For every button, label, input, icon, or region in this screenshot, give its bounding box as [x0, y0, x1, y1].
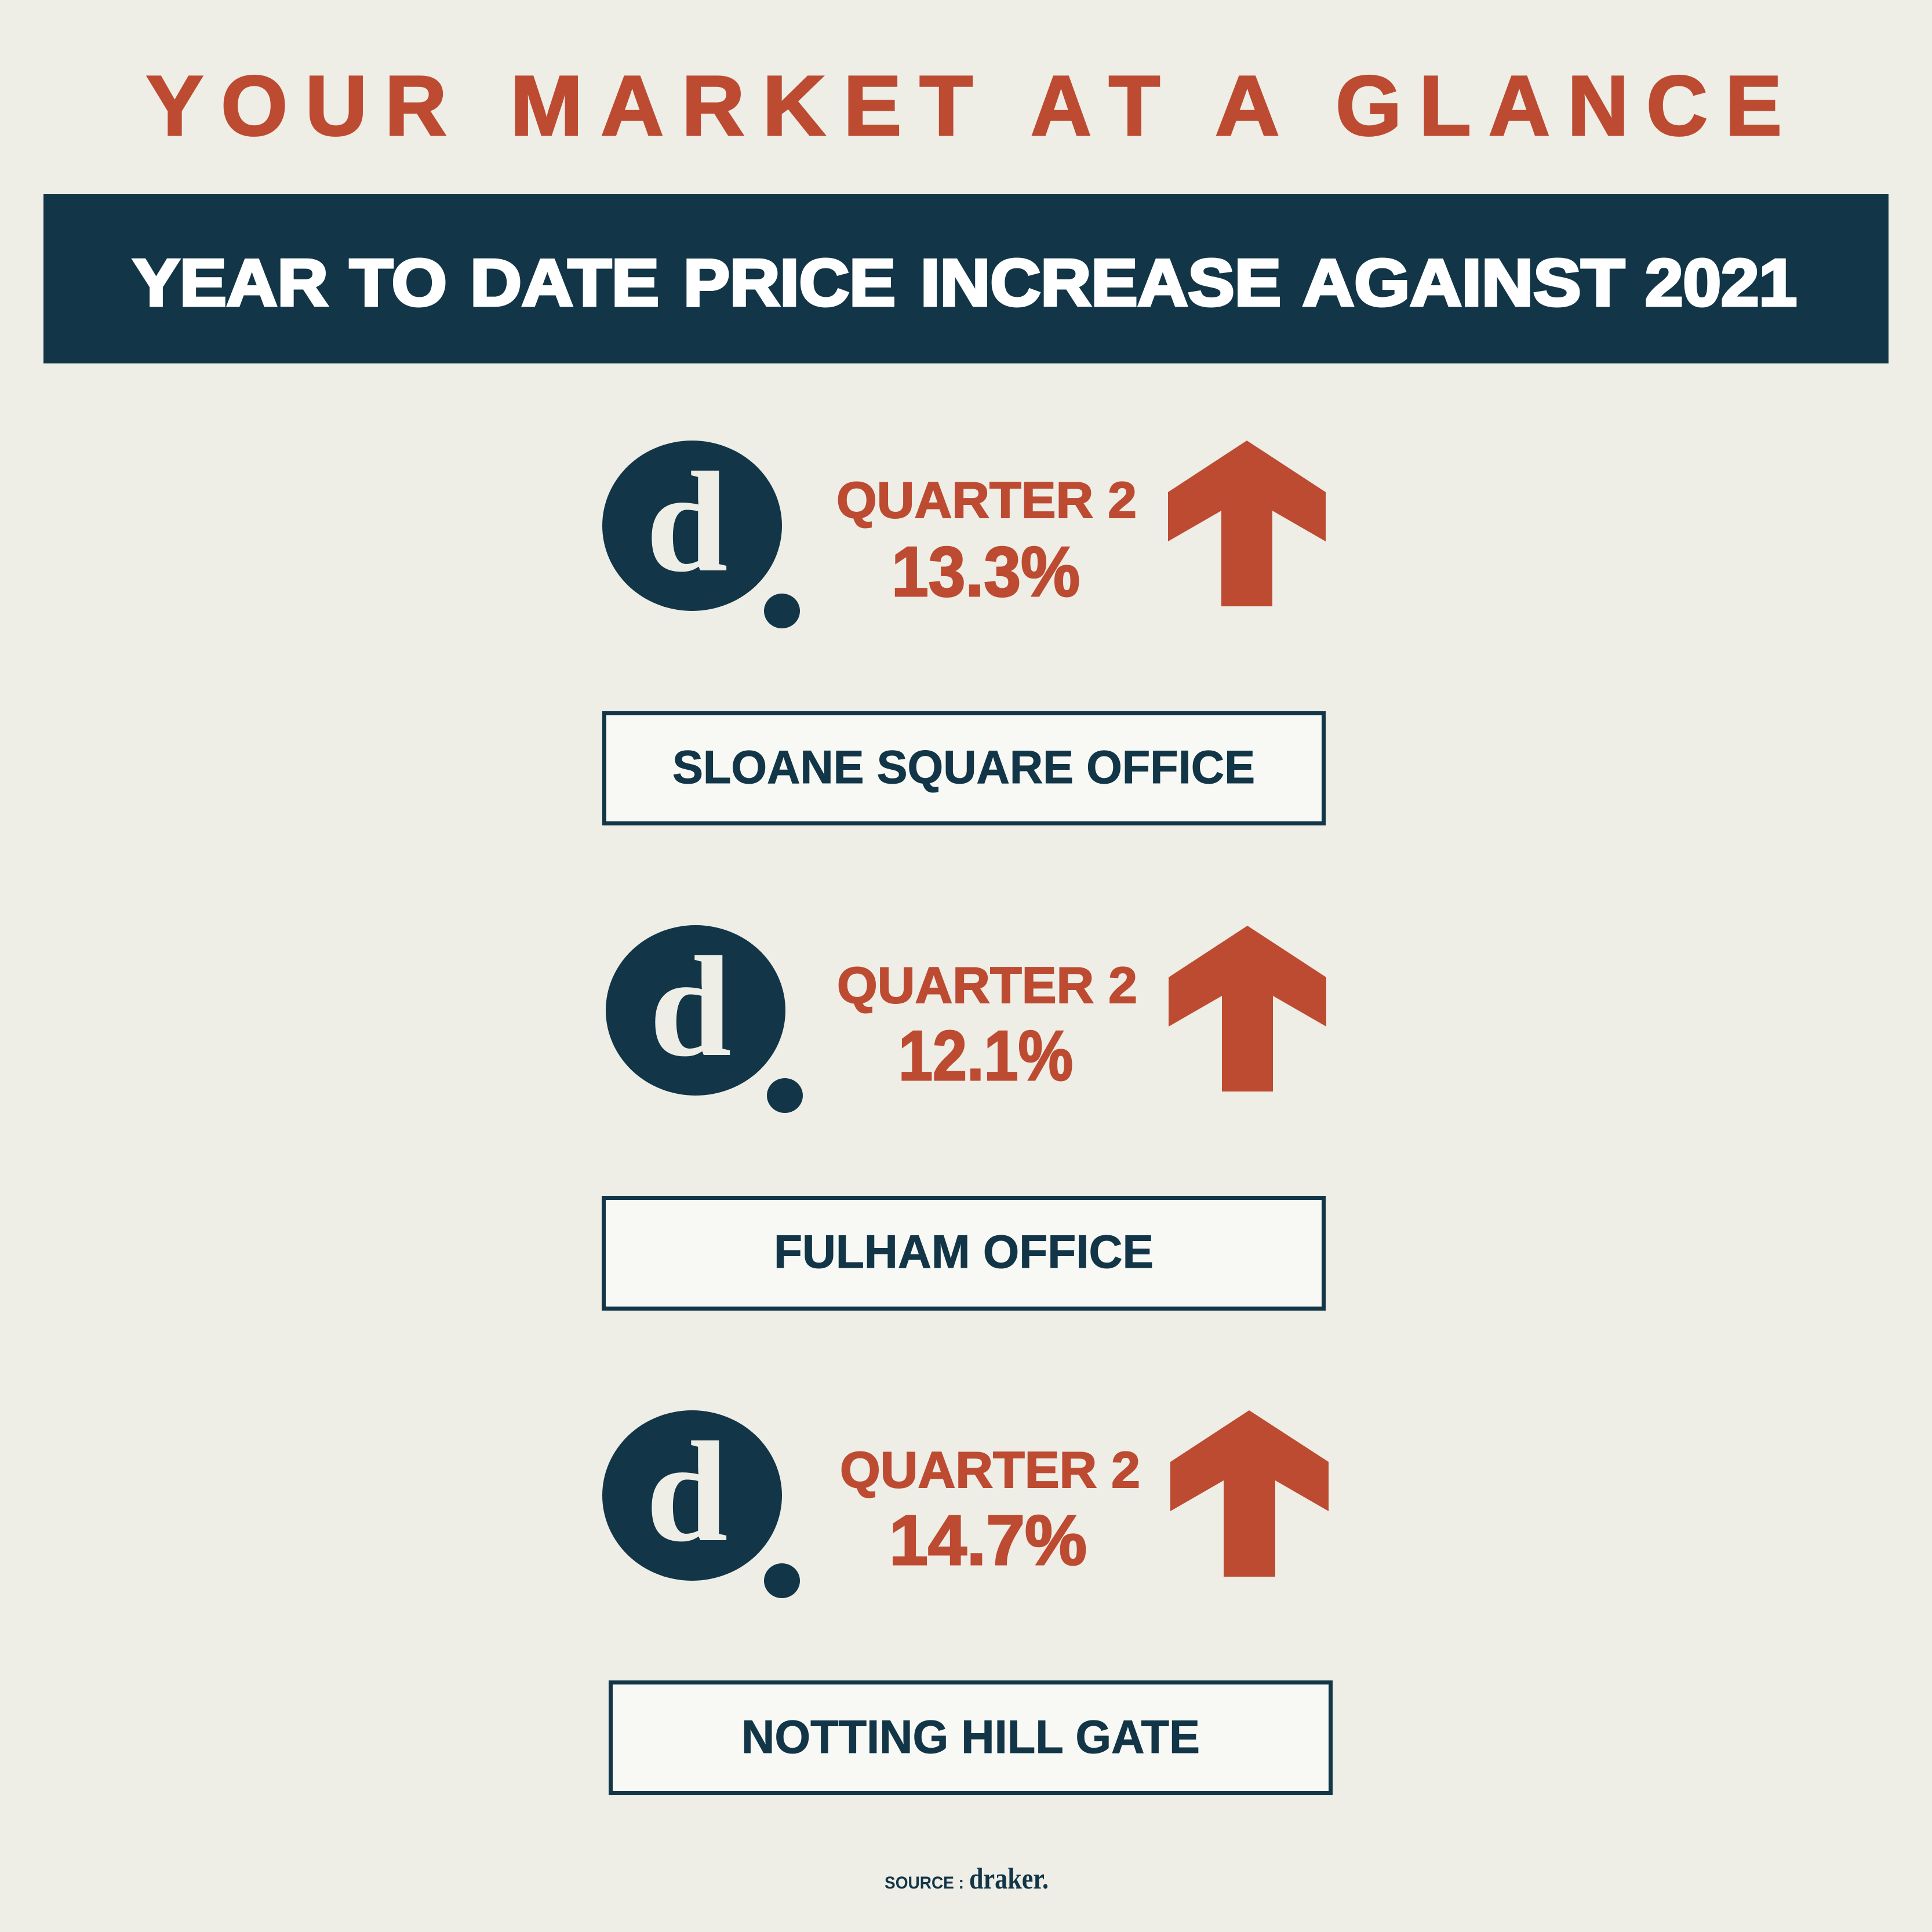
panel: Sloane Square Office	[602, 441, 1326, 823]
office label box	[604, 713, 1324, 823]
panel: Notting Hill Gate	[602, 1410, 1331, 1793]
heading: year to date price increase: PRICE	[683, 246, 896, 320]
source credit: SOURCE :	[885, 1873, 964, 1893]
office label box: NOTTING HILL GATE	[741, 1711, 1200, 1763]
heading: year to date price increase: INCREASE	[920, 246, 1281, 320]
title: AT	[1031, 59, 1177, 154]
title: MARKET	[510, 59, 991, 154]
quarter label: QUARTER 2	[840, 1441, 1140, 1498]
arrow up	[1168, 441, 1326, 606]
icon: logo d	[606, 925, 803, 1113]
icon: logo d: d	[646, 1412, 728, 1571]
heading: year to date price increase	[133, 246, 1797, 320]
office label box	[604, 1198, 1324, 1309]
percentage: 14.7%	[889, 1501, 1087, 1580]
panel: banner	[43, 194, 1889, 363]
office label box	[611, 1682, 1331, 1793]
heading: year to date price increase: YEAR	[133, 246, 328, 320]
quarter label: QUARTER 2	[836, 471, 1137, 529]
heading: year to date price increase: AGAINST	[1302, 246, 1625, 320]
office label box: FULHAM OFFICE	[774, 1226, 1154, 1278]
source credit	[885, 1862, 1049, 1895]
heading: year to date price increase: 2021	[1645, 246, 1797, 320]
panel: Fulham Office	[604, 925, 1326, 1309]
quarter label: QUARTER 2	[837, 956, 1137, 1014]
title: GLANCE	[1336, 59, 1799, 154]
icon: logo d	[602, 441, 800, 628]
source credit: draker.	[969, 1862, 1049, 1895]
title: A	[1215, 59, 1298, 154]
icon: logo d: d	[646, 442, 728, 602]
icon: logo d: d	[649, 927, 732, 1086]
office label box: SLOANE SQUARE OFFICE	[672, 741, 1255, 794]
percentage: 13.3%	[892, 532, 1080, 611]
title: YOUR	[146, 59, 464, 154]
icon: logo d	[602, 1410, 800, 1598]
heading: year to date price increase: DATE	[470, 246, 659, 320]
percentage: 12.1%	[898, 1016, 1073, 1095]
heading: year to date price increase: TO	[350, 246, 447, 320]
title	[146, 59, 1799, 154]
arrow up	[1169, 926, 1326, 1091]
arrow up	[1170, 1410, 1329, 1577]
